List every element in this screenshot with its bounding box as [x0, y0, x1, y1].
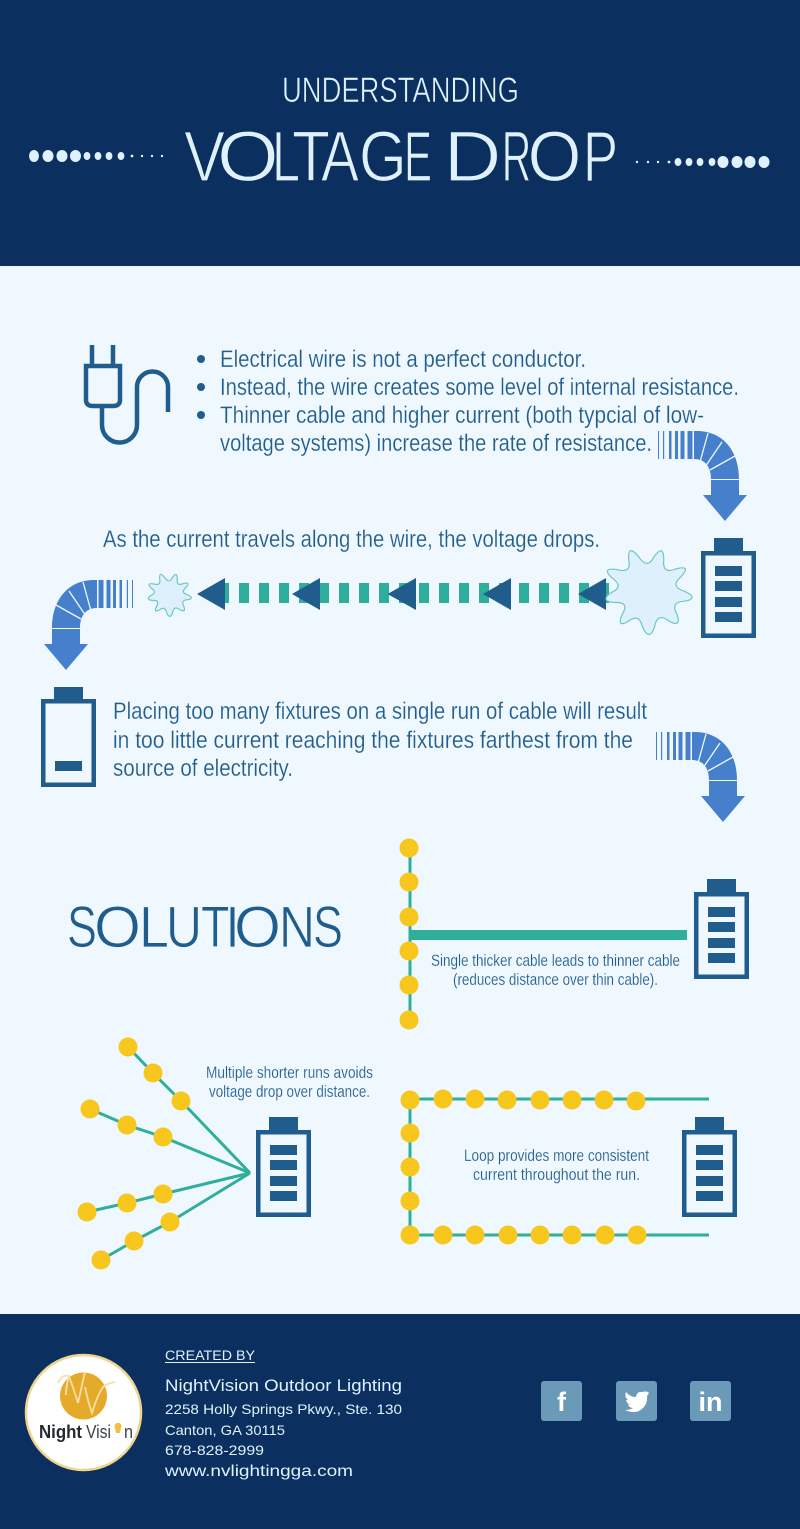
- heading: solutions: T: [201, 895, 230, 960]
- text: too many fixtures: [113, 698, 647, 782]
- text: too many fixtures: in too little current reaching the fixtures farthest from the: [113, 727, 633, 754]
- title: voltage drop: O: [528, 118, 582, 197]
- battery: low: [41, 687, 96, 787]
- battery: multiple runs: [256, 1117, 311, 1217]
- heading: solutions: L: [139, 895, 169, 960]
- text: thicker cable: [431, 951, 680, 989]
- arrow: curved down right 2: [656, 732, 745, 822]
- heading: solutions: O: [234, 895, 281, 960]
- text: loop: current throughout the run.: [473, 1165, 640, 1184]
- text: too many fixtures: Placing too many fixtures on a single run of cable will result: [113, 698, 647, 725]
- text: too many fixtures: source of electricity.: [113, 755, 293, 782]
- battery: loop: [682, 1117, 737, 1217]
- battery: full, top: [701, 538, 756, 638]
- diagram: thicker cable: [400, 838, 687, 1030]
- title: voltage drop: D: [444, 118, 501, 197]
- heading: solutions: I: [226, 895, 240, 960]
- bullet list: [197, 346, 739, 457]
- dots: right: [636, 156, 770, 168]
- arrow: curved down left: [44, 580, 133, 670]
- heading: solutions: N: [279, 895, 315, 960]
- contact details: 2258 Holly Springs Pkwy., Ste. 130: [165, 1401, 402, 1417]
- icon: linkedin: [690, 1381, 731, 1421]
- panel: footer: [0, 1314, 800, 1529]
- bullet list: Thinner cable and higher current (both typcial of low-: [220, 402, 704, 429]
- title: voltage drop: P: [583, 118, 618, 197]
- logo: n: [124, 1422, 133, 1442]
- text: multiple runs: [206, 1063, 373, 1101]
- text: loop: Loop provides more consistent: [464, 1146, 649, 1165]
- text: current travels: As the current travels along the wire, the voltage drops.: [103, 526, 600, 553]
- text: thicker cable: (reduces distance over thin cable).: [453, 970, 658, 989]
- contact details: Canton, GA 30115: [165, 1422, 285, 1438]
- heading: solutions: S: [67, 895, 97, 960]
- text: loop: [464, 1146, 649, 1184]
- title: voltage drop: O: [217, 118, 279, 197]
- title: voltage drop: T: [292, 118, 330, 197]
- icon: facebook: f: [557, 1387, 567, 1417]
- text: thicker cable: Single thicker cable leads to thinner cable: [431, 951, 680, 970]
- icon: linkedin: in: [698, 1387, 722, 1417]
- spark: large: [606, 551, 692, 634]
- icon: twitter: [616, 1381, 657, 1421]
- title: voltage drop: R: [502, 118, 531, 197]
- diagram: multiple runs: [78, 1038, 250, 1270]
- title: voltage drop: E: [404, 118, 432, 197]
- battery: thicker cable: [694, 879, 749, 979]
- contact details: NightVision Outdoor Lighting: [165, 1376, 402, 1395]
- arrow: curved down right: [658, 431, 747, 521]
- bullet list: Electrical wire is not a perfect conductor.: [220, 346, 586, 373]
- spark: small: [148, 574, 191, 616]
- panel: header: [0, 0, 800, 266]
- heading: solutions: U: [166, 895, 202, 960]
- icon: facebook: [541, 1381, 582, 1421]
- title: voltage drop: L: [272, 118, 300, 197]
- created by: CREATED BY: [165, 1348, 255, 1363]
- diagram: loop: [400, 1090, 709, 1244]
- title: voltage drop: V: [184, 118, 226, 197]
- logo: Visi: [86, 1422, 111, 1442]
- title: voltage drop: G: [359, 118, 407, 197]
- text: multiple runs: voltage drop over distance.: [209, 1082, 370, 1101]
- bullet list: voltage systems) increase the rate of resistance.: [220, 430, 652, 457]
- logo: [26, 1355, 141, 1470]
- title: understanding: UNDERSTANDING: [282, 71, 519, 110]
- dashed wire with arrowheads: [197, 578, 609, 610]
- contact details: 678-828-2999: [165, 1442, 264, 1458]
- heading: solutions: O: [94, 895, 141, 960]
- contact details: www.nvlightingga.com: [164, 1463, 353, 1480]
- text: multiple runs: Multiple shorter runs avoids: [206, 1063, 373, 1082]
- contact details: [164, 1376, 402, 1480]
- icon: plug: [86, 345, 168, 442]
- title: voltage drop: A: [321, 118, 360, 197]
- logo: Night: [39, 1422, 82, 1442]
- dots: left: [29, 150, 163, 162]
- heading: solutions: S: [313, 895, 343, 960]
- page background: [0, 266, 800, 1314]
